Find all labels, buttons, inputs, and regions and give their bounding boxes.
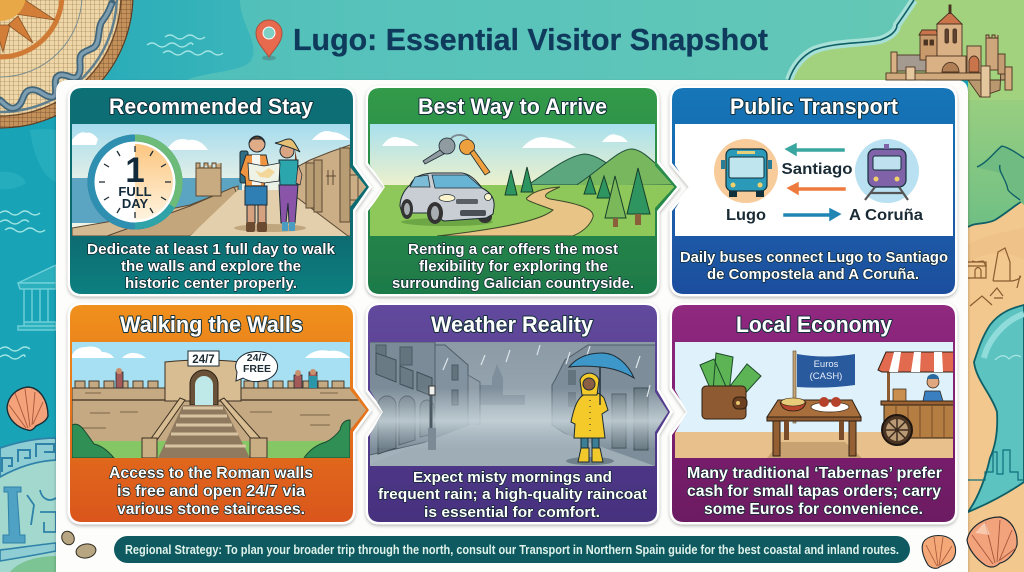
keys bbox=[450, 135, 469, 141]
body text: Renting a car offers the most bbox=[408, 241, 618, 258]
body text: surrounding Galician countryside. bbox=[392, 275, 634, 292]
body text: Daily buses connect Lugo to Santiago bbox=[680, 249, 948, 266]
tapas bbox=[780, 402, 806, 411]
title text: Lugo: Essential Visitor Snapshot bbox=[293, 22, 768, 57]
icon: location pin bbox=[256, 20, 282, 60]
body text: is free and open 24/7 via bbox=[117, 483, 305, 500]
panel: walking the walls bbox=[70, 305, 372, 522]
speech bubble: 24/7 free bbox=[236, 352, 278, 382]
man bbox=[240, 151, 248, 183]
sign: 24/7 bbox=[188, 351, 219, 366]
arrow: teal to santiago bbox=[786, 144, 844, 155]
heading: Weather Reality bbox=[431, 312, 594, 337]
sign: 24/7: 24/7 bbox=[192, 354, 215, 366]
mosaic compass bbox=[0, 0, 133, 128]
heading: Best Way to Arrive bbox=[418, 94, 607, 119]
woman bbox=[295, 150, 297, 160]
icon: bus bbox=[714, 139, 778, 203]
icon: castle bbox=[886, 5, 1012, 97]
waves top left bbox=[147, 35, 223, 55]
map bbox=[248, 163, 280, 183]
body text bbox=[392, 241, 634, 292]
body text: various stone staircases. bbox=[117, 501, 305, 518]
callout: regional strategy: Regional Strategy: To plan your broader trip through the north, consult our Transport in Northern Spain guide for the best coastal and inland routes. bbox=[125, 543, 899, 557]
body text bbox=[109, 465, 313, 518]
body text: the walls and explore the bbox=[121, 258, 301, 275]
body text: is essential for comfort. bbox=[424, 504, 600, 521]
callout: regional strategy bbox=[114, 536, 910, 563]
body text bbox=[680, 249, 948, 283]
label: santiago: Santiago bbox=[782, 161, 852, 178]
body text: historic center properly. bbox=[125, 275, 297, 292]
white content panel bbox=[56, 80, 968, 572]
icon: scallop shell large bbox=[967, 517, 1017, 567]
icon: clock one full day bbox=[88, 135, 182, 229]
body text bbox=[378, 469, 647, 521]
illustration: rainy street bbox=[365, 342, 670, 466]
panel: public transport bbox=[672, 88, 955, 294]
illustration: car and road bbox=[365, 124, 680, 236]
icon: scallop shell small bbox=[922, 536, 956, 568]
mosaic arch bottom left bbox=[0, 438, 56, 572]
icon: clock one full day: 1 bbox=[125, 151, 145, 190]
body text: cash for small tapas orders; carry bbox=[687, 483, 941, 500]
label: a coruña: A Coruña bbox=[849, 207, 923, 224]
body text bbox=[687, 465, 942, 518]
arrow: blue to a coruña bbox=[784, 209, 840, 220]
body text: some Euros for convenience. bbox=[704, 501, 923, 518]
body text: flexibility for exploring the bbox=[419, 258, 608, 275]
illustration: tapas market: Euros bbox=[814, 359, 839, 370]
waves left bbox=[0, 211, 45, 359]
icon: scallop shell left bbox=[7, 387, 48, 430]
body text bbox=[87, 241, 336, 292]
illustration area bbox=[675, 124, 953, 236]
illustration: roman wall and staircase bbox=[72, 342, 372, 458]
heading: Walking the Walls bbox=[120, 312, 303, 337]
heading: Public Transport bbox=[730, 94, 899, 119]
flag bbox=[793, 351, 796, 423]
icon: clock one full day: FULL bbox=[118, 184, 152, 199]
panel: weather reality bbox=[365, 305, 670, 522]
mountains on map bbox=[977, 146, 1024, 205]
icon: clock one full day: DAY bbox=[122, 196, 148, 211]
speech bubble: 24/7 free: 24/7 bbox=[247, 352, 267, 364]
body text: de Compostela and A Coruña. bbox=[707, 266, 919, 283]
panel: recommended stay bbox=[70, 88, 372, 294]
illustration: tapas market: (CASH) bbox=[810, 371, 842, 382]
panel: best way to arrive bbox=[365, 88, 680, 294]
body text: frequent rain; a high-quality raincoat bbox=[378, 486, 647, 503]
body text: Many traditional ‘Tabernas’ prefer bbox=[687, 465, 942, 482]
body text: Dedicate at least 1 full day to walk bbox=[87, 241, 336, 258]
icon: train bbox=[855, 139, 919, 203]
panel: local economy bbox=[672, 305, 955, 522]
car bbox=[401, 218, 493, 226]
body text: Access to the Roman walls bbox=[109, 465, 313, 482]
arrow: orange from a coruña bbox=[788, 183, 845, 194]
sand ruin sketches bbox=[968, 248, 1021, 306]
icon: pebbles bbox=[59, 529, 97, 560]
speech bubble: 24/7 free: FREE bbox=[243, 363, 271, 375]
icon: temple outline bbox=[18, 265, 56, 330]
heading: Recommended Stay bbox=[109, 94, 314, 119]
title bbox=[256, 20, 768, 60]
label: lugo: Lugo bbox=[726, 207, 766, 224]
stall bbox=[887, 372, 890, 400]
wallet and bills bbox=[700, 353, 761, 398]
heading: Local Economy bbox=[736, 312, 893, 337]
body text: Expect misty mornings and bbox=[413, 469, 612, 486]
table bbox=[767, 400, 861, 417]
illustration: couple on the walls bbox=[72, 124, 372, 236]
illustration: tapas market bbox=[675, 342, 955, 458]
city skyline in water bbox=[968, 450, 1024, 480]
